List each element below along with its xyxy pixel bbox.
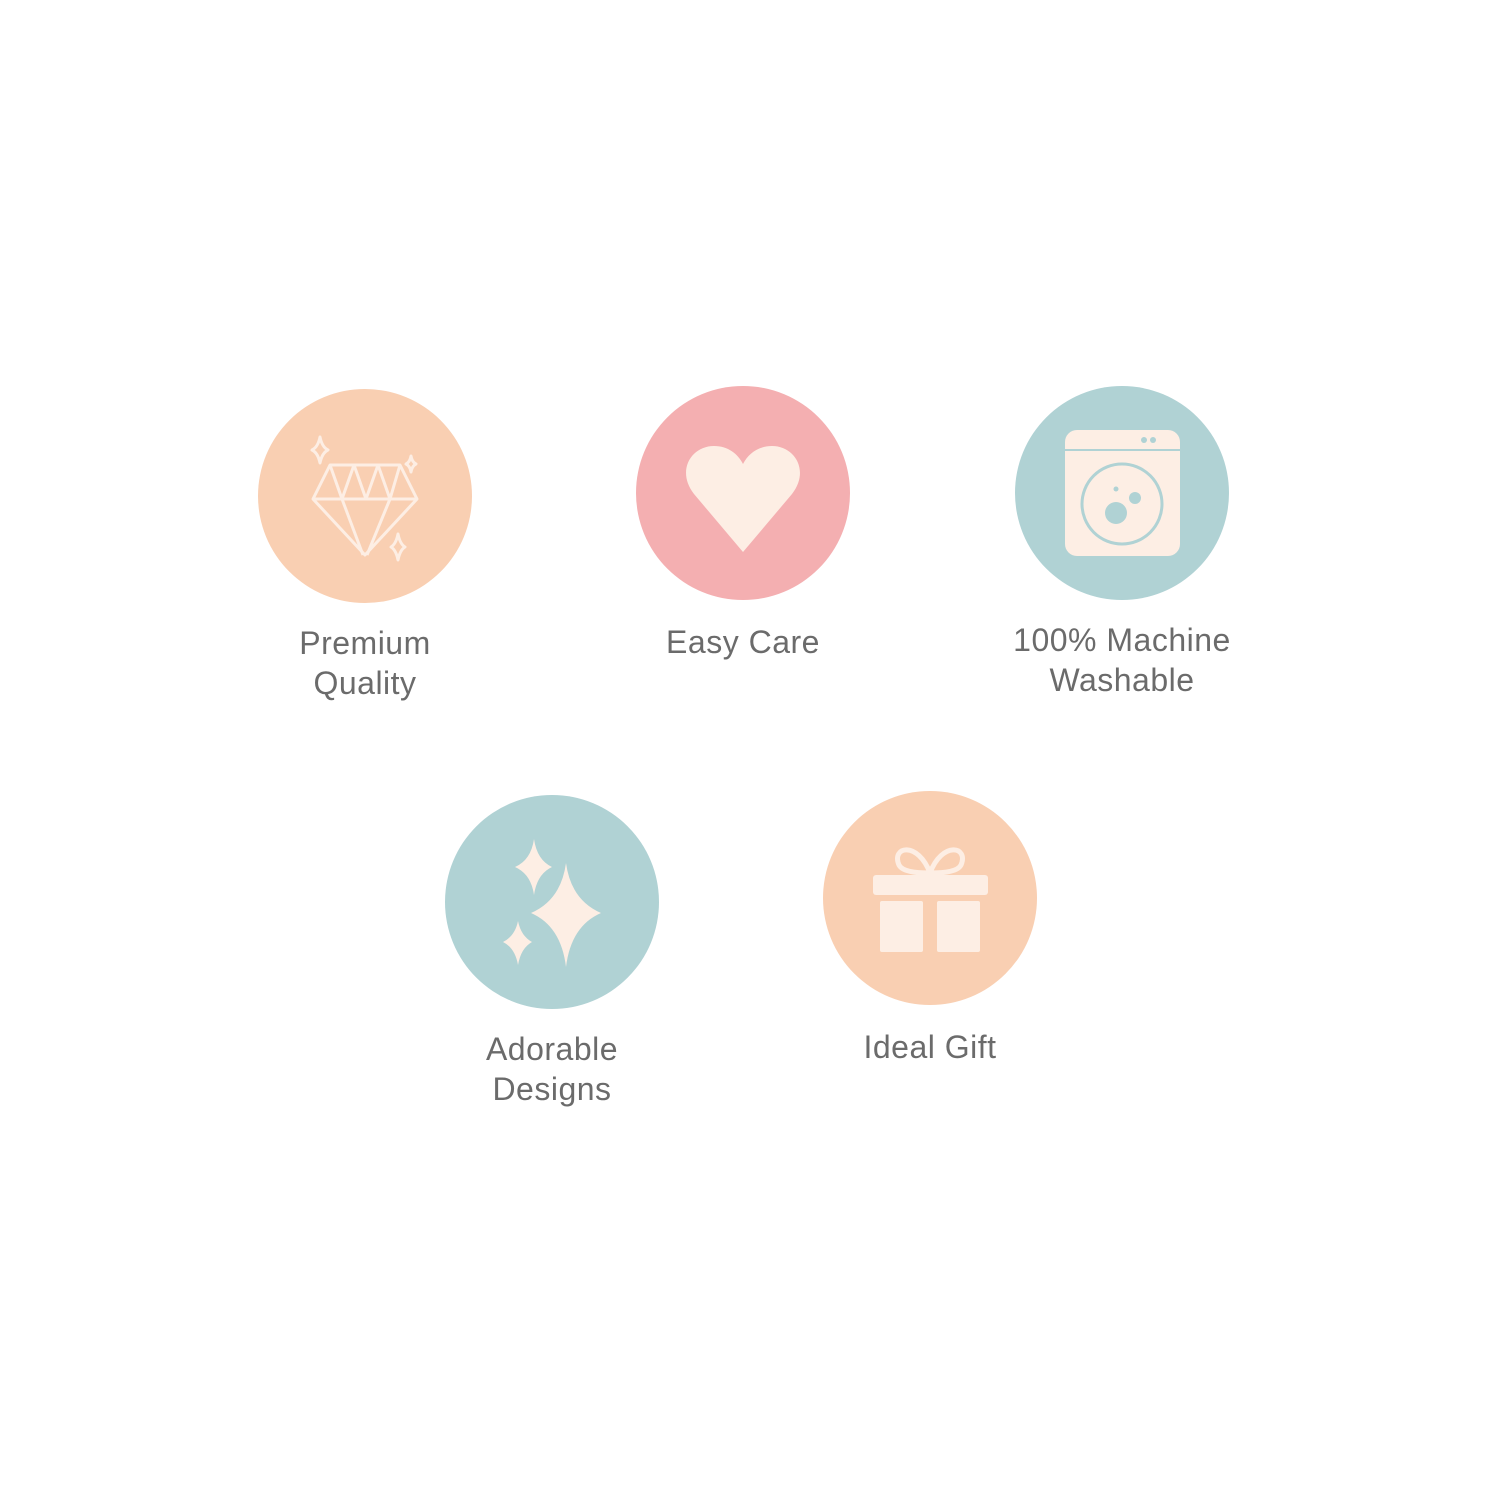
- label: Quality: [313, 665, 417, 701]
- icon: sparkles: [445, 795, 659, 1009]
- item: 100% Machine Washable: [1013, 386, 1231, 698]
- label: Adorable: [486, 1031, 618, 1067]
- item: Premium Quality: [258, 389, 472, 701]
- label: Ideal Gift: [863, 1029, 997, 1065]
- label: Designs: [492, 1071, 612, 1107]
- icon: diamond: [258, 389, 472, 603]
- label: Premium: [299, 625, 431, 661]
- icon: gift: [823, 791, 1037, 1005]
- item: Adorable Designs: [445, 795, 659, 1107]
- icon: heart: [636, 386, 850, 600]
- icon: washing machine: [1015, 386, 1229, 600]
- label: Easy Care: [666, 624, 820, 660]
- label: [299, 625, 431, 701]
- item: Ideal Gift: [823, 791, 1037, 1065]
- label: Washable: [1049, 662, 1195, 698]
- label: [486, 1031, 618, 1107]
- item: Easy Care: [636, 386, 850, 660]
- label: 100% Machine: [1013, 622, 1231, 658]
- label: [1013, 622, 1231, 698]
